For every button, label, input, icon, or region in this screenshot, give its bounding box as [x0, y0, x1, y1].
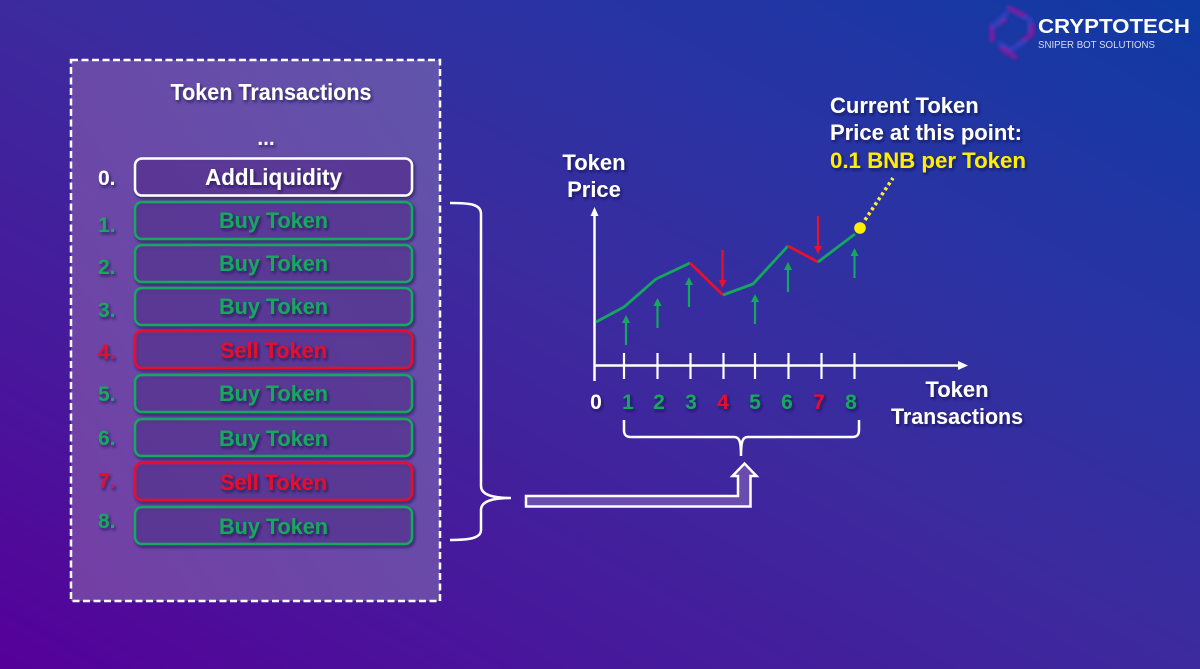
x tick labels: 3 [685, 391, 697, 414]
row 7: sell token [98, 463, 412, 500]
x tick labels [590, 391, 857, 414]
callout: current token price: Price at this point: [830, 120, 1022, 145]
row 4: sell token: 4. [98, 341, 116, 364]
brand tagline: SNIPER BOT SOLUTIONS [1038, 40, 1155, 51]
row 6: buy token: Buy Token [219, 426, 328, 451]
row 6: buy token: 6. [98, 427, 116, 450]
row 0: add liquidity: 0. [98, 167, 116, 190]
callout: current token price: Current Token [830, 93, 979, 118]
x tick labels: 7 [813, 391, 825, 414]
row 2: buy token [98, 245, 412, 282]
row 8: buy token [98, 507, 412, 544]
price line [596, 234, 855, 322]
row 4: sell token: Sell Token [220, 338, 327, 363]
y axis [590, 207, 598, 381]
logo icon [992, 8, 1032, 57]
buy arrows [622, 248, 858, 345]
row 8: buy token: Buy Token [219, 514, 328, 539]
y axis title: Token [562, 150, 626, 175]
x tick labels: 4 [717, 391, 729, 414]
row 1: buy token: 1. [98, 214, 116, 237]
callout: current token price: 0.1 BNB per Token [830, 148, 1026, 173]
row 2: buy token: Buy Token [219, 251, 328, 276]
row 2: buy token: 2. [98, 256, 116, 279]
bracket: all transactions [450, 203, 511, 540]
heading: token transactions: Token Transactions [170, 79, 372, 105]
row 4: sell token [98, 331, 412, 368]
x tick labels: 0 [590, 391, 602, 414]
row 0: add liquidity [98, 158, 412, 196]
row 3: buy token [98, 288, 412, 325]
row 7: sell token: Sell Token [220, 470, 327, 495]
logo: cryptotech [992, 8, 1190, 57]
row 6: buy token [98, 419, 412, 456]
row 5: buy token: Buy Token [219, 381, 328, 406]
x tick labels: 8 [845, 391, 857, 414]
panel: token transactions [71, 60, 440, 601]
x tick labels: 6 [781, 391, 793, 414]
row 0: add liquidity: AddLiquidity [205, 164, 342, 190]
row 1: buy token: Buy Token [219, 208, 328, 233]
chart: token price over transactions [590, 178, 968, 414]
x axis with ticks [594, 353, 968, 379]
bracket: transactions 1 to 8 [624, 420, 859, 456]
x tick labels: 2 [653, 391, 665, 414]
row 3: buy token: 3. [98, 299, 116, 322]
x tick labels: 1 [622, 391, 634, 414]
current price dot with leader [854, 178, 893, 234]
row 7: sell token: 7. [98, 470, 116, 493]
arrow: transactions to chart [526, 464, 756, 506]
sell arrows [718, 216, 822, 288]
row 5: buy token: 5. [98, 383, 116, 406]
row 3: buy token: Buy Token [219, 294, 328, 319]
ellipsis: ... [257, 127, 275, 150]
x axis title: Token [925, 377, 989, 402]
brand name: CRYPTOTECH [1038, 16, 1190, 38]
row 1: buy token [98, 202, 412, 239]
x tick labels: 5 [749, 391, 761, 414]
x axis title: Transactions [891, 404, 1023, 429]
y axis title: Price [567, 177, 621, 202]
row 5: buy token [98, 375, 412, 412]
row 8: buy token: 8. [98, 510, 116, 533]
